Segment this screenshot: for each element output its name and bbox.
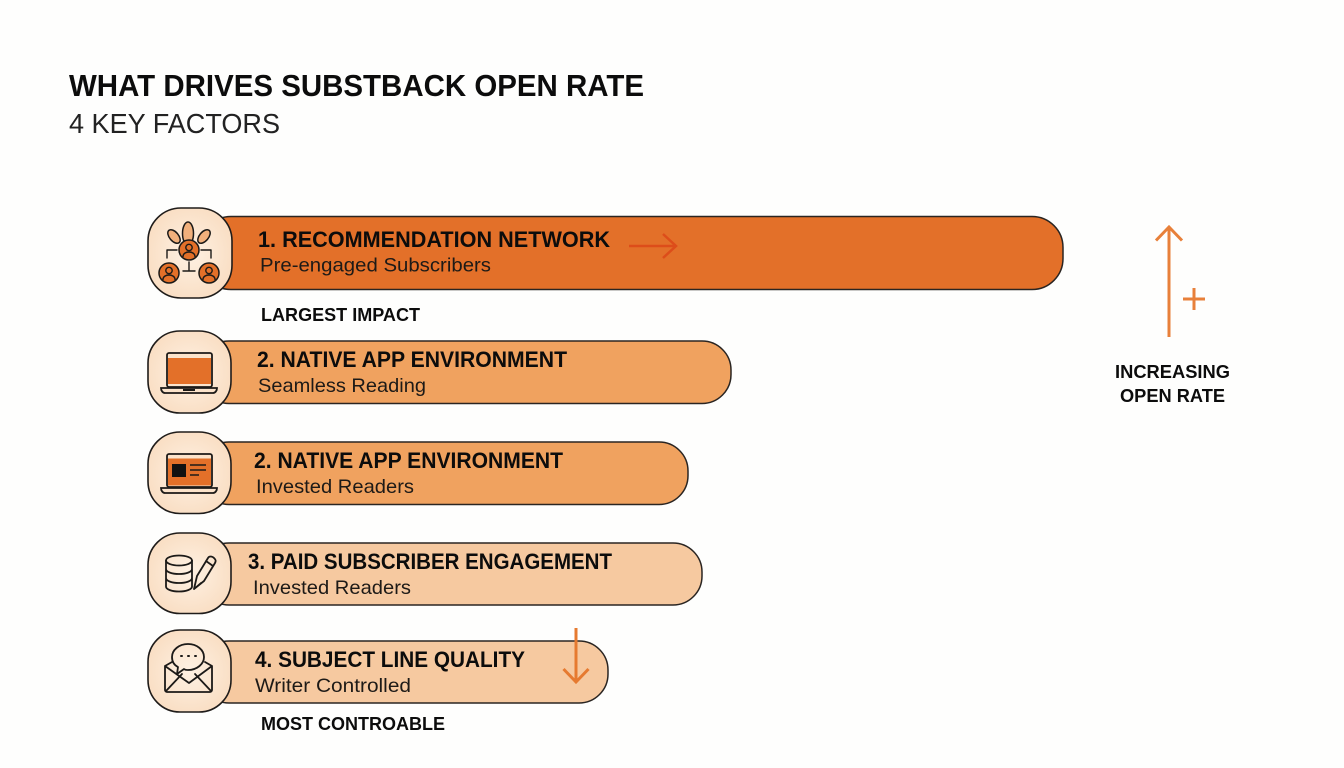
bar 2: [200, 341, 731, 404]
heading 2: 2. NATIVE APP ENVIRONMENT: [257, 347, 568, 372]
panel: factor 4 subject line quality: [148, 628, 608, 712]
arrow: down: [564, 628, 588, 682]
subheading 1: Pre-engaged Subscribers: [260, 254, 491, 276]
subheading 4: Invested Readers: [253, 577, 411, 599]
subheading 5: Writer Controlled: [255, 675, 411, 697]
bar 4: [200, 543, 702, 605]
icon: database and pen: [148, 533, 231, 614]
bar 3: [200, 442, 688, 504]
title: [69, 68, 644, 139]
label: increasing open rate: OPEN RATE: [1120, 386, 1225, 406]
icon: envelope with speech bubble: [148, 630, 231, 712]
subheading 3: Invested Readers: [256, 476, 414, 498]
heading 1: 1. RECOMMENDATION NETWORK: [258, 227, 610, 252]
label: increasing open rate: INCREASING: [1115, 362, 1230, 382]
heading 4: 3. PAID SUBSCRIBER ENGAGEMENT: [248, 549, 613, 574]
label: largest impact: LARGEST IMPACT: [261, 305, 420, 325]
title: 4 KEY FACTORS: [69, 108, 280, 139]
heading 3: 2. NATIVE APP ENVIRONMENT: [254, 448, 564, 473]
arrow: increasing open rate: [1156, 227, 1205, 337]
label: increasing open rate: [1115, 362, 1230, 406]
heading 5: 4. SUBJECT LINE QUALITY: [255, 647, 525, 672]
subheading 2: Seamless Reading: [258, 375, 426, 397]
panel: factor 3 paid subscriber engagement: [148, 533, 702, 614]
icon: laptop with article: [148, 432, 231, 514]
arrow: right: [629, 234, 676, 258]
panel: factor 2 native app, seamless reading: [148, 331, 731, 413]
label: most controllable: MOST CONTROABLE: [261, 714, 445, 734]
icon: recommendation network: [148, 208, 232, 298]
panel: factor 2 native app, invested readers: [148, 432, 688, 514]
bar 1: [200, 216, 1063, 290]
bar 5: [200, 641, 608, 703]
icon: laptop: [148, 331, 231, 413]
title: WHAT DRIVES SUBSTBACK OPEN RATE: [69, 68, 644, 103]
panel: factor 1 recommendation network: [148, 208, 1063, 298]
